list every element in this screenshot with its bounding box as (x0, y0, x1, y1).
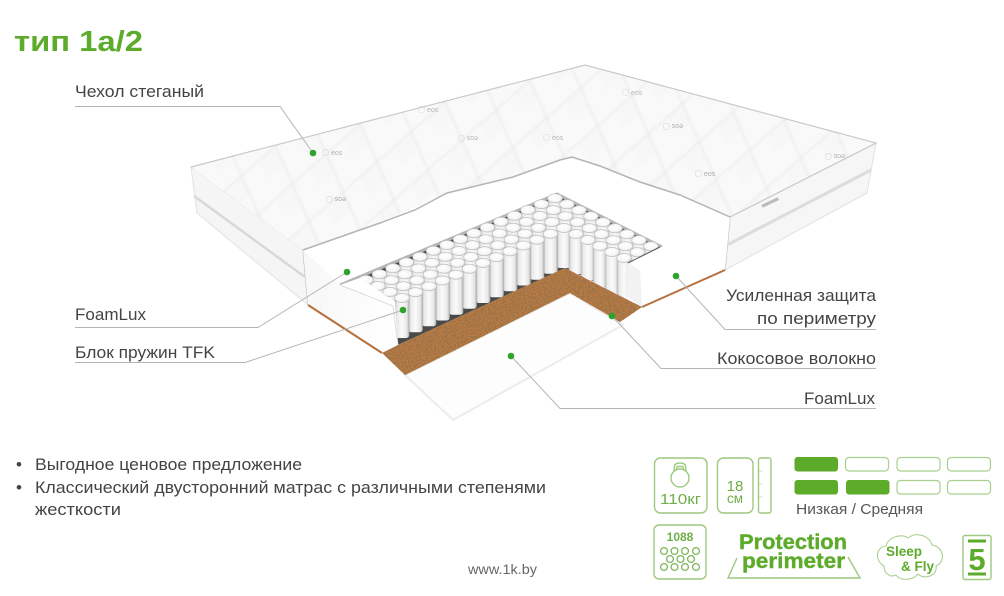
bullet list (16, 455, 546, 519)
callout: perimeter protection: Усиленная защита (726, 286, 877, 305)
icon: height 18 cm: см (727, 491, 743, 506)
firmness scale: Низкая / Средняя (796, 501, 923, 518)
quilted cover: top surface: ◯ eos (418, 106, 439, 114)
website: www.1k.by (467, 561, 537, 577)
pocket springs block TFK (359, 194, 658, 338)
icon: height 18 cm: 18 (727, 478, 743, 495)
coconut fibre layer (308, 268, 725, 375)
icon: protection perimeter: Protection (739, 530, 847, 554)
icon: max load 110 kg (654, 458, 707, 513)
quilted cover: top surface: eos ◯ (326, 195, 346, 203)
bullet list: • (16, 478, 22, 497)
icon: protection perimeter (728, 530, 860, 578)
foam layer under cover (303, 157, 730, 353)
callout: FoamLux left: FoamLux (75, 305, 146, 324)
callout: FoamLux left (75, 269, 350, 328)
quilted cover: right side (725, 143, 876, 270)
foam perimeter block: left (303, 250, 398, 353)
bullet list: Классический двусторонний матрас с различными степенями (35, 478, 546, 497)
icon: protection perimeter: perimeter (742, 549, 846, 573)
mattress illustration (180, 60, 890, 420)
callout: FoamLux bottom (508, 353, 876, 408)
quilted cover: top surface: eos ◯ (825, 152, 845, 160)
quilted cover: top surface: eos ◯ (458, 134, 478, 142)
callout: FoamLux bottom: FoamLux (804, 389, 875, 408)
bullet list: жесткости (35, 500, 121, 519)
spring cavity (340, 194, 662, 345)
quilted cover: top surface (191, 64, 878, 250)
quilted cover: top surface: ◯ eos (322, 149, 343, 157)
callout: spring block (75, 307, 406, 362)
icon: 5 years warranty: 5 (968, 542, 986, 577)
icon: Sleep & Fly cloud (877, 535, 942, 579)
callout: spring block: Блок пружин TFK (75, 343, 216, 362)
callout: cover (75, 82, 316, 156)
callout: perimeter protection (673, 273, 877, 330)
foam perimeter block: right (627, 217, 730, 307)
callout: cover: Чехол стеганый (75, 82, 204, 101)
bullet list: • (16, 455, 22, 474)
icon: Sleep & Fly cloud: Sleep (886, 544, 922, 559)
icon: 1088 springs (654, 525, 706, 579)
icon: Sleep & Fly cloud: & Fly (901, 559, 934, 574)
icon: max load 110 kg: 110кг (660, 491, 702, 508)
quilted cover: left side (191, 167, 308, 305)
callout: perimeter protection: по периметру (757, 309, 877, 328)
quilted cover: top surface: ◯ eos (543, 134, 564, 142)
title: тип 1а/2 (14, 26, 143, 58)
callout: coconut fibre: Кокосовое волокно (717, 349, 876, 368)
callout: coconut fibre (609, 313, 876, 368)
quilted cover: top surface: ◯ eos (695, 170, 716, 178)
bottom foam layer (405, 293, 623, 420)
quilted cover: top surface: ◯ eos (622, 89, 643, 97)
icon: height 18 cm (718, 458, 771, 513)
bullet list: Выгодное ценовое предложение (35, 455, 302, 474)
icon: 5 years warranty (963, 536, 991, 580)
quilted cover: top surface: eos ◯ (663, 122, 683, 130)
icon: 1088 springs: 1088 (667, 530, 694, 544)
firmness scale (795, 458, 990, 518)
